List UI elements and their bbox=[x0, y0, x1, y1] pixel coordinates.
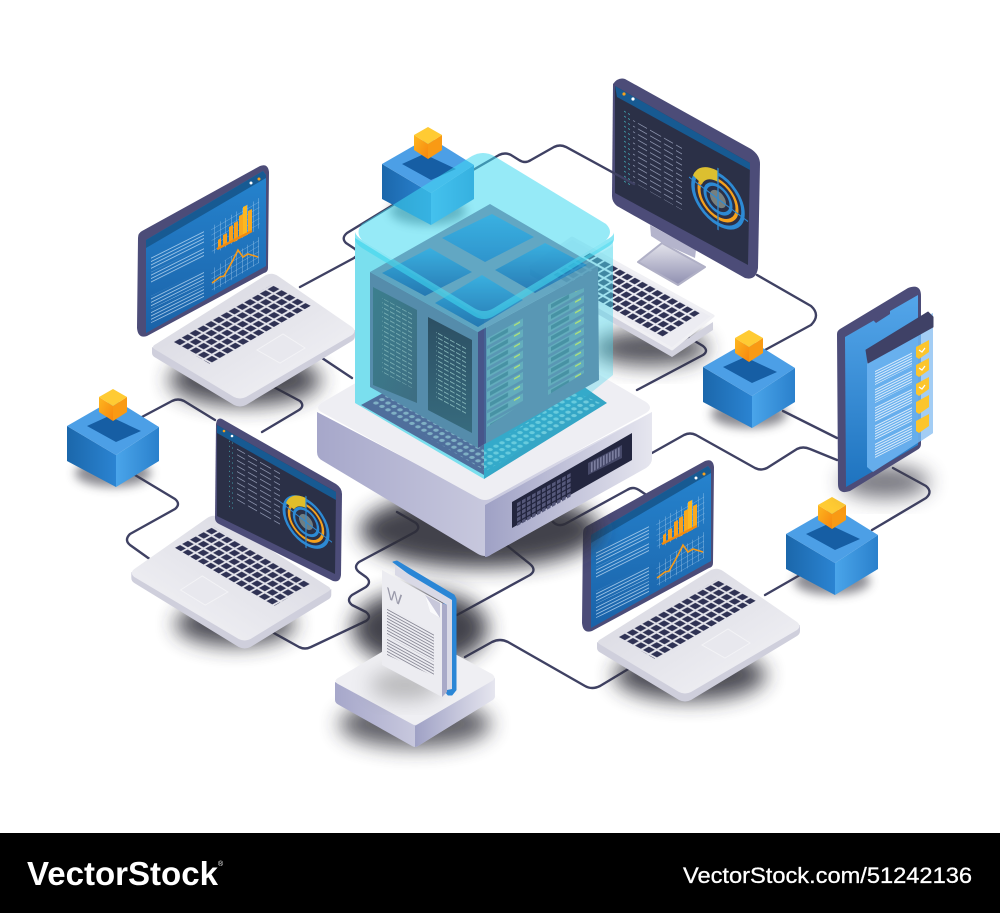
image url: VectorStock.com/51242136 bbox=[683, 863, 972, 888]
page text bbox=[387, 607, 434, 662]
checklist lines bbox=[875, 352, 912, 385]
brand logo text: VectorStock bbox=[27, 855, 219, 892]
laptop top left bbox=[137, 165, 355, 406]
document soft shadow bbox=[370, 670, 440, 700]
monitor bbox=[612, 79, 760, 279]
blockchain cube left bbox=[67, 389, 159, 487]
page bbox=[382, 570, 442, 697]
keyboard bbox=[172, 284, 312, 364]
perforated floor tile bbox=[361, 384, 607, 479]
keyboard top right bbox=[530, 238, 713, 357]
connector lines bbox=[127, 205, 930, 688]
server base platform bbox=[317, 310, 652, 557]
glass right face overlay bbox=[484, 246, 613, 479]
laptop base bbox=[152, 330, 355, 406]
blockchain cube top bbox=[703, 330, 795, 428]
tablet shadow bbox=[841, 466, 929, 498]
radial chart bbox=[280, 482, 332, 562]
laptop screen bbox=[137, 165, 269, 337]
line over monitor bbox=[473, 146, 634, 184]
platform shadow bbox=[339, 700, 491, 748]
glass enclosure back faces bbox=[355, 238, 613, 479]
footer band bbox=[0, 833, 1000, 913]
checkboxes bbox=[916, 340, 929, 359]
document book bbox=[382, 561, 456, 697]
keyboard shadow bbox=[592, 330, 708, 366]
monitor stand bbox=[638, 225, 705, 285]
registered mark: ® bbox=[218, 860, 224, 868]
glass plate edge bbox=[355, 232, 614, 319]
rack top bbox=[370, 204, 598, 332]
page fold bbox=[425, 595, 440, 618]
blue cover bbox=[393, 561, 456, 695]
vent panel bbox=[512, 433, 632, 528]
laptop dark screen bbox=[215, 419, 342, 581]
text lines bbox=[151, 230, 204, 270]
rack right face bbox=[478, 267, 599, 448]
small gold cube bbox=[735, 338, 749, 362]
laptop base bbox=[131, 516, 331, 648]
laptop bottom right bbox=[582, 460, 800, 702]
document shadow bbox=[352, 590, 488, 666]
document platform bbox=[335, 633, 495, 747]
tablet with checklist bbox=[837, 287, 933, 492]
line chart bbox=[211, 237, 259, 292]
cube shadow bbox=[711, 400, 787, 428]
glass enclosure top plate bbox=[358, 153, 610, 311]
laptop shadow bbox=[169, 354, 321, 406]
laptop bottom left bbox=[131, 419, 342, 648]
server rack bbox=[370, 267, 599, 448]
rack code lines bbox=[382, 298, 412, 388]
window buttons bbox=[250, 182, 252, 184]
server base shadow bbox=[360, 492, 600, 568]
W letter: W bbox=[387, 583, 403, 610]
bar chart bbox=[211, 198, 260, 255]
blockchain cube center bbox=[382, 127, 474, 225]
radial chart bbox=[689, 152, 748, 246]
laptop shadow bbox=[175, 602, 295, 646]
rack left face bbox=[370, 272, 478, 448]
trackpad bbox=[257, 334, 305, 363]
checklist panel bbox=[867, 313, 933, 472]
blockchain cube bottom right bbox=[786, 497, 878, 595]
